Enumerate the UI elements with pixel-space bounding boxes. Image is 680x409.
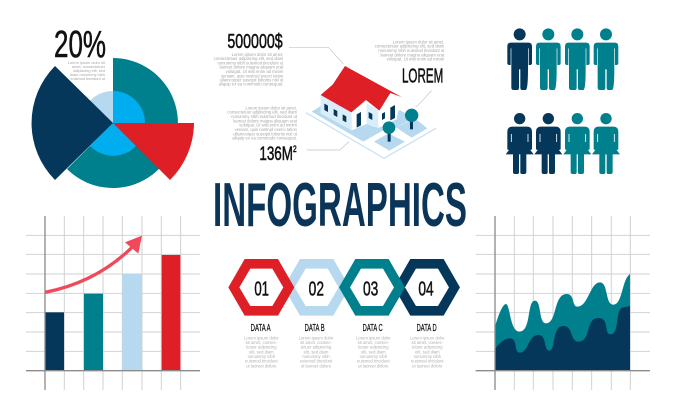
- step labels: DATA B: [305, 323, 325, 334]
- trees: [383, 109, 418, 142]
- step D text: [410, 335, 445, 368]
- step B text: euismod tincidunt: [300, 359, 333, 364]
- women row: [506, 113, 620, 174]
- panel: polar pie chart: [32, 24, 194, 188]
- area heading: 2: [293, 144, 297, 154]
- pie slice: light blue quarter: [81, 91, 113, 123]
- title: INFOGRAPHICS: [213, 171, 467, 240]
- step D text: euismod tincidunt: [411, 359, 444, 364]
- step D text: ut laoreet dolore: [412, 363, 443, 368]
- area description text: laoreet dolore magna aliquam erat: [233, 118, 298, 123]
- percentage heading: 20%: [54, 24, 106, 66]
- step C text: nonummy nibh: [360, 354, 388, 359]
- area description text: volutpat. Ut wisi enim ad minim: [239, 123, 297, 128]
- trend arrow: [45, 236, 142, 292]
- area description text: veniam, quis nostrud exerci tation: [235, 127, 298, 132]
- step numbers: 04: [418, 278, 434, 300]
- house walls: [321, 93, 401, 130]
- panel: bar chart: [26, 216, 200, 390]
- price description text: volutpat. Ut wisi enim ad minim: [226, 69, 284, 74]
- step B text: [299, 335, 334, 368]
- bar: navy: [45, 312, 64, 371]
- price description text: [214, 52, 284, 87]
- pie description text: Lorem ipsum dolor sit: [68, 60, 106, 65]
- bar: light blue: [122, 274, 142, 371]
- area series: teal: [495, 274, 630, 370]
- price description text: ullamcorper suscipit lobortis nisl ut: [220, 78, 284, 83]
- area heading: 136M: [259, 144, 308, 165]
- step B text: Lorem ipsum dolor: [299, 335, 334, 340]
- lorem description text: [375, 39, 445, 62]
- chart axes: [26, 216, 200, 390]
- step B text: sit amet, consec-: [300, 340, 332, 345]
- price description text: Lorem ipsum dolor sit amet,: [232, 52, 283, 57]
- lorem heading: LOREM: [402, 65, 443, 87]
- step D text: elit, sed diam: [415, 349, 440, 354]
- panel: house illustration: [214, 30, 445, 165]
- step B text: elit, sed diam: [304, 349, 329, 354]
- step D text: sit amet, consec-: [411, 340, 444, 345]
- step A text: Lorem ipsum dolor: [244, 335, 279, 340]
- step A text: ut laoreet dolore: [246, 363, 277, 368]
- area description text: consectetuer adipiscing elit, sed diam: [227, 110, 297, 115]
- windows and doors: [324, 104, 395, 128]
- lorem description text: volutpat. Ut wisi enim ad minim: [387, 57, 445, 62]
- area description text: nonummy nibh euismod tincidunt ut: [231, 114, 298, 119]
- pie description text: diam nonummy nibh: [70, 72, 105, 77]
- area description text: aliquip ex ea commodo consequat.: [232, 136, 297, 141]
- step C text: euismod tincidunt: [357, 359, 390, 364]
- pie slice: teal ring: [67, 58, 178, 188]
- lorem description text: nonummy nibh euismod tincidunt ut: [378, 48, 445, 53]
- area description text: [227, 105, 298, 141]
- step C text: sit amet, consec-: [357, 340, 390, 345]
- step A text: nonummy nibh: [248, 354, 276, 359]
- step A text: tetuer adipiscing: [246, 345, 277, 350]
- area series: navy: [495, 306, 630, 370]
- panel: people pictograms: [506, 28, 620, 174]
- step D text: Lorem ipsum dolor: [410, 335, 445, 340]
- step C text: ut laoreet dolore: [358, 363, 389, 368]
- step C text: elit, sed diam: [361, 349, 386, 354]
- price description text: aliquip ex ea commodo consequat.: [219, 82, 283, 87]
- ground plate: [306, 103, 436, 158]
- step B text: tetuer adipiscing: [301, 345, 332, 350]
- bar: teal: [84, 294, 103, 371]
- step C text: tetuer adipiscing: [358, 345, 389, 350]
- step A text: sit amet, consec-: [246, 340, 278, 345]
- step numbers: 03: [363, 278, 378, 300]
- step labels: DATA A: [251, 323, 271, 334]
- step numbers: 01: [254, 278, 269, 300]
- lorem description text: consectetuer adipiscing elit, sed diam: [375, 44, 445, 49]
- step labels: DATA C: [363, 323, 383, 334]
- price description text: nonummy nibh euismod tincidunt ut: [217, 60, 284, 65]
- panel: area chart: [476, 216, 650, 390]
- step C text: [356, 335, 391, 368]
- price heading: 500000$: [227, 30, 283, 53]
- price description text: consectetuer adipiscing elit, sed diam: [214, 56, 284, 61]
- step D text: nonummy nibh: [414, 354, 442, 359]
- step numbers: 02: [309, 278, 324, 300]
- pie description text: euismod tincidunt ut: [70, 76, 106, 81]
- pie slice: red: [113, 123, 194, 180]
- step A text: euismod tincidunt: [245, 359, 278, 364]
- pie description text: [68, 60, 106, 81]
- step labels: DATA D: [417, 323, 437, 334]
- pie description text: adipiscing elit, sed: [73, 68, 105, 73]
- step A text: elit, sed diam: [249, 349, 274, 354]
- leader lines: [289, 47, 432, 150]
- step C text: Lorem ipsum dolor: [356, 335, 391, 340]
- red roof: [321, 66, 402, 112]
- men row: [507, 28, 618, 90]
- price description text: laoreet dolore magna aliquam erat: [220, 65, 284, 70]
- pie description text: amet, consectetuer: [72, 64, 106, 69]
- step labels: [251, 323, 437, 334]
- step D text: tetuer adipiscing: [412, 345, 443, 350]
- area description text: ullamcorper suscipit lobortis nisl ut: [233, 131, 298, 136]
- pie slice: cyan inner: [90, 91, 145, 156]
- hexagon chain: [228, 259, 460, 316]
- step B text: ut laoreet dolore: [301, 363, 332, 368]
- step B text: nonummy nibh: [302, 354, 330, 359]
- panel: hexagon steps: [228, 259, 460, 368]
- pie slice: navy: [32, 66, 113, 180]
- lorem description text: laoreet dolore magna aliquam erat: [381, 52, 445, 57]
- chart axes: [476, 216, 650, 390]
- price description text: veniam, quis nostrud exerci tation: [221, 73, 284, 78]
- step numbers: [254, 278, 434, 300]
- step A text: [244, 335, 279, 368]
- area description text: Lorem ipsum dolor sit amet,: [245, 105, 297, 110]
- lorem description text: Lorem ipsum dolor sit amet,: [393, 39, 444, 44]
- bar: red: [162, 255, 180, 371]
